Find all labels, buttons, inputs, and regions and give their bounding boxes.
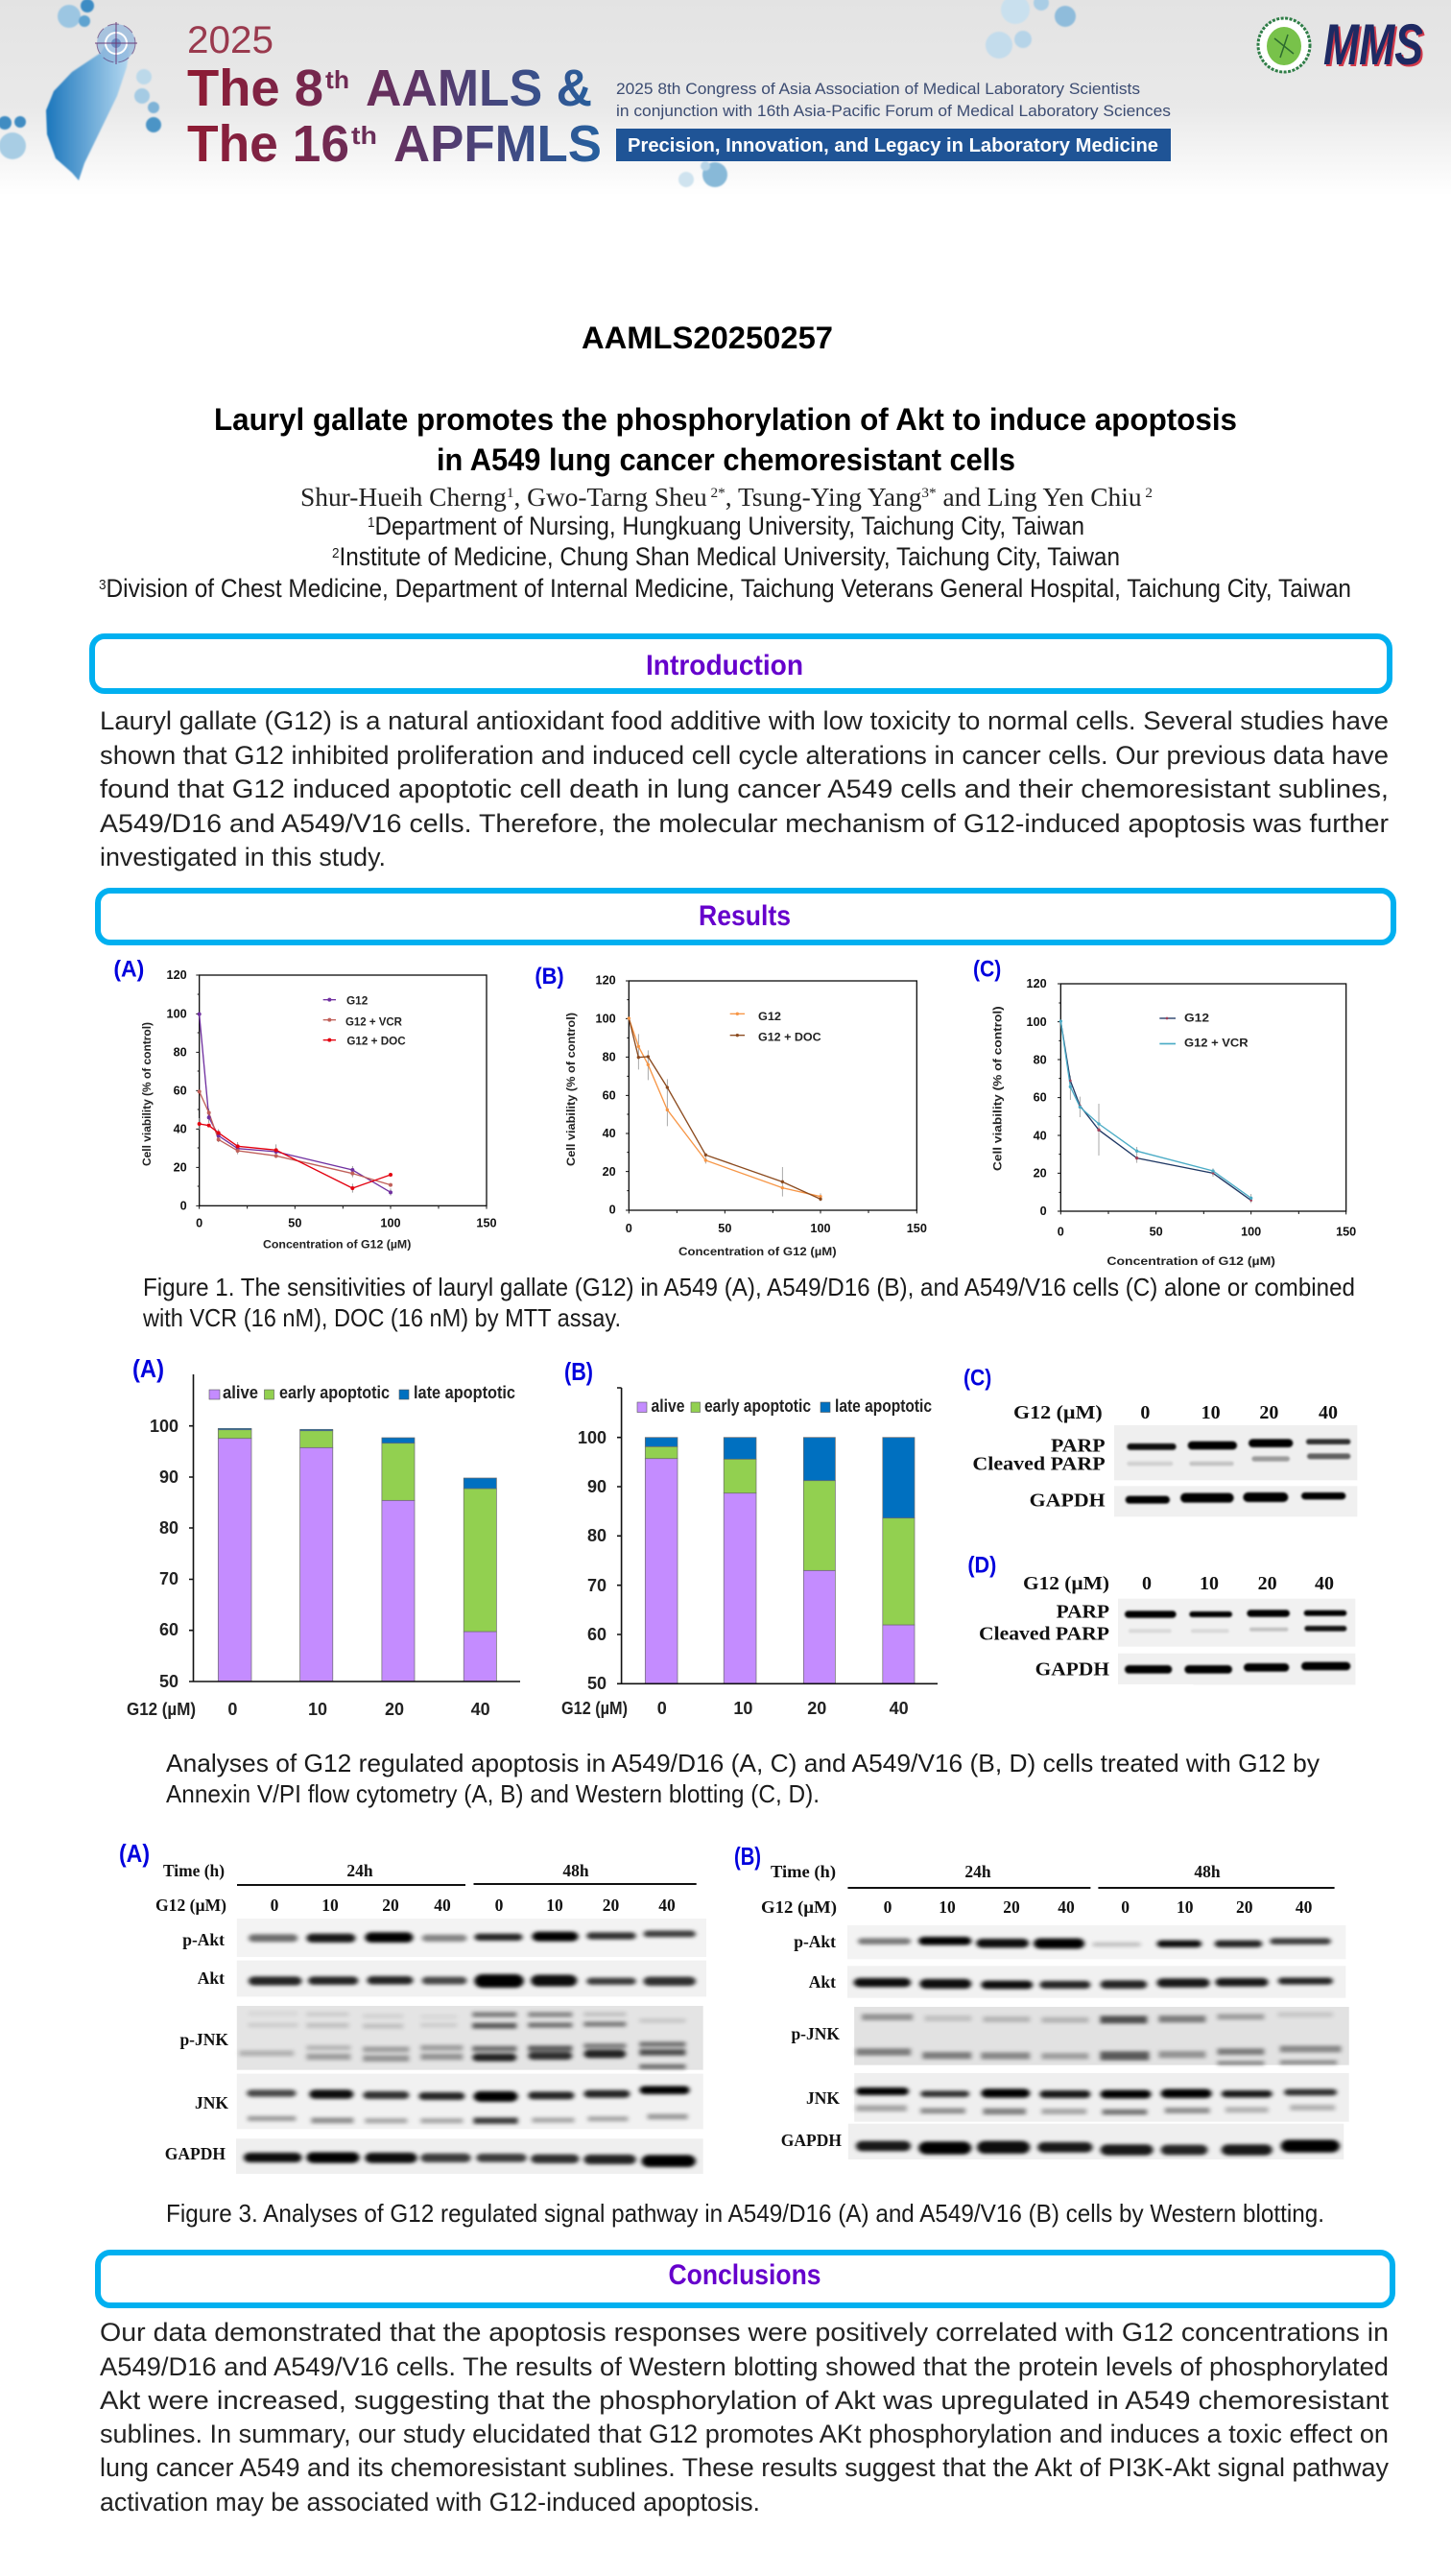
text block: Introduction body: investigated in this study. bbox=[100, 843, 386, 871]
chart: Figure 1C A549/V16 viability: G12 bbox=[1184, 1012, 1209, 1025]
title: Lauryl gallate promotes the phosphorylation of Akt to induce apoptosis bbox=[214, 402, 1237, 437]
panel: Figure 2C blot: Cleaved PARP bbox=[972, 1454, 1106, 1475]
western blot: Figure 3A A549/D16: 0 bbox=[495, 1896, 504, 1915]
chart: Figure 1A A549 viability: Cell viability (% of control) bbox=[140, 1022, 154, 1166]
bands: JNK bbox=[248, 2087, 688, 2123]
chart: Figure 2B A549/V16 stacked bars: 10 bbox=[733, 1699, 752, 1718]
affiliations: Department of Nursing, Hungkuang University, Taichung City, Taiwan bbox=[375, 512, 1084, 540]
panel: Conclusions heading bbox=[98, 2253, 1392, 2305]
chart: Figure 2A A549/D16 stacked bars: 20 bbox=[385, 1700, 404, 1719]
title bbox=[214, 402, 1237, 477]
authors: and Ling Yen Chiu bbox=[937, 483, 1142, 512]
heading: conference names: APFMLS bbox=[393, 115, 602, 173]
western blots: Figure 2C and 2D PARP bbox=[963, 1365, 1357, 1684]
chart: Figure 2A A549/D16 stacked bars: 10 bbox=[308, 1700, 327, 1719]
western blot: Figure 3B A549/V16: 0 bbox=[1121, 1897, 1130, 1917]
authors: Shur-Hueih Cherng bbox=[300, 483, 504, 512]
western blot: Figure 3A A549/D16: GAPDH bbox=[165, 2144, 226, 2163]
chart: Figure 2B A549/V16 stacked bars: 70 bbox=[587, 1576, 607, 1595]
western blot: Figure 3B A549/V16: 40 bbox=[1058, 1897, 1075, 1917]
chart: Figure 1A A549 viability: 100 bbox=[380, 1216, 401, 1229]
chart: Figure 2B A549/V16 stacked bars: 80 bbox=[587, 1526, 607, 1545]
chart: Figure 1B A549/D16 viability: 150 bbox=[907, 1222, 927, 1235]
bands: p-Akt bbox=[859, 1938, 1330, 1947]
caption: Figure 1: Figure 1. The sensitivities of lauryl gallate (G12) in A549 (A), A549/D16 (B), and A549/V16 cells (C) alone or combined bbox=[143, 1273, 1355, 1301]
chart: Figure 1C A549/V16 viability: 100 bbox=[1241, 1225, 1261, 1238]
western blot: Figure 3A A549/D16: p-Akt bbox=[182, 1930, 225, 1949]
chart: Figure 1B A549/D16 viability: Concentration of G12 (µM) bbox=[678, 1245, 837, 1258]
chart: Figure 1B A549/D16 viability: 0 bbox=[626, 1222, 632, 1235]
chart: Figure 2A A549/D16 stacked bars: 50 bbox=[159, 1672, 178, 1691]
text block: Conclusions body: activation may be associated with G12-induced apoptosis. bbox=[100, 2488, 760, 2516]
bands: p-JNK bbox=[857, 2013, 1340, 2064]
bands: GAPDH bbox=[245, 2153, 695, 2166]
caption: Figure 2: Annexin V/PI flow cytometry (A, B) and Western blotting (C, D). bbox=[166, 1779, 820, 1808]
chart: Figure 2B A549/V16 stacked bars bbox=[561, 1357, 938, 1718]
chart: Figure 2B A549/V16 stacked bars: 50 bbox=[587, 1674, 607, 1693]
chart: Figure 1A A549 viability: G12 + VCR bbox=[345, 1015, 402, 1029]
chart: Figure 1A A549 viability: 60 bbox=[174, 1084, 187, 1097]
chart: Figure 2A A549/D16 stacked bars bbox=[127, 1354, 520, 1719]
chart: Figure 2B A549/V16 stacked bars: (B) bbox=[564, 1357, 593, 1386]
authors: 2 bbox=[1142, 486, 1153, 501]
chart: Figure 1B A549/D16 viability: Cell viability (% of control) bbox=[564, 1013, 578, 1166]
chart: Figure 1C A549/V16 viability: 100 bbox=[1027, 1015, 1047, 1029]
panel: Figure 2D blot: 20 bbox=[1258, 1573, 1277, 1594]
western blot: Figure 3B A549/V16: 48h bbox=[1194, 1862, 1221, 1881]
chart: Figure 2A A549/D16 stacked bars: 40 bbox=[471, 1700, 490, 1719]
chart: Figure 2B A549/V16 stacked bars: 0 bbox=[657, 1699, 667, 1718]
chart: Figure 1A A549 viability: 100 bbox=[167, 1007, 187, 1020]
panel: Figure 2D blot: 40 bbox=[1315, 1573, 1334, 1594]
panel: Figure 2D blot: Cleaved PARP bbox=[979, 1623, 1109, 1644]
text: congress description: in conjunction with 16th Asia-Pacific Forum of Medical Laboratory Sciences bbox=[616, 102, 1171, 120]
affiliations: Division of Chest Medicine, Department of Internal Medicine, Taichung Veterans General Hospital, Taichung City, Taiwan bbox=[107, 574, 1351, 603]
legend bbox=[209, 1383, 515, 1402]
chart: Figure 1A A549 viability: G12 + DOC bbox=[346, 1035, 406, 1048]
western blot: Figure 3B A549/V16: G12 (µM) bbox=[761, 1897, 837, 1917]
western blot: Figure 3B A549/V16 bbox=[734, 1842, 1349, 2159]
chart: Figure 2A A549/D16 stacked bars: G12 (µM) bbox=[127, 1700, 196, 1719]
text block: Introduction body: found that G12 induced apoptotic cell death in lung cancer A549 cells and their chemoresistant sublines, bbox=[100, 775, 1389, 803]
chart: Figure 1A A549 viability: 120 bbox=[167, 968, 187, 982]
text block: Conclusions body: lung cancer A549 and its chemoresistant sublines. These results suggest that the Akt of PI3K-Akt signal pathway bbox=[100, 2453, 1389, 2482]
text: congress description: 2025 8th Congress of Asia Association of Medical Laboratory Scientists bbox=[616, 80, 1140, 98]
bands: Akt bbox=[855, 1978, 1332, 1988]
panel: Figure 2C blot: 20 bbox=[1259, 1402, 1278, 1423]
chart: Figure 1A A549 viability bbox=[113, 956, 497, 1252]
title: in A549 lung cancer chemoresistant cells bbox=[437, 442, 1015, 477]
chart: Figure 1B A549/D16 viability: 40 bbox=[603, 1127, 616, 1140]
text: congress description bbox=[616, 80, 1171, 120]
conference header banner bbox=[0, 0, 1451, 196]
bands: Akt bbox=[250, 1975, 695, 1987]
legend: alive bbox=[651, 1396, 685, 1416]
chart: Figure 1B A549/D16 viability: 100 bbox=[596, 1012, 616, 1025]
chart: Figure 2A A549/D16 stacked bars: (A) bbox=[132, 1354, 164, 1383]
chart: Figure 1B A549/D16 viability: 20 bbox=[603, 1165, 616, 1179]
text block: Introduction body: shown that G12 inhibited proliferation and induced cell cycle alterations in cancer cells. Our previous data have bbox=[100, 741, 1389, 770]
western blot: Figure 3B A549/V16: 10 bbox=[1177, 1897, 1194, 1917]
authors: 3* bbox=[921, 486, 937, 501]
text block: Conclusions body: Our data demonstrated that the apoptosis responses were positively correlated with G12 concentrations in bbox=[100, 2318, 1389, 2347]
authors: 2* bbox=[707, 486, 726, 501]
affiliations: 1 bbox=[368, 514, 375, 531]
western blot: Figure 3A A549/D16: 40 bbox=[434, 1896, 451, 1915]
panel: Figure 2C blot: (C) bbox=[963, 1365, 991, 1391]
legend: alive bbox=[223, 1383, 258, 1402]
chart: Figure 1A A549 viability: G12 bbox=[346, 994, 369, 1008]
chart: Figure 1A A549 viability: Concentration of G12 (µM) bbox=[263, 1238, 411, 1252]
panel: Figure 2C blot: G12 (µM) bbox=[1013, 1402, 1103, 1423]
caption: Figure 3: Figure 3. Analyses of G12 regulated signal pathway in A549/D16 (A) and A549/V16 (B) cells by Western blotting. bbox=[166, 2199, 1324, 2228]
chart: Figure 1A A549 viability: 20 bbox=[174, 1160, 187, 1174]
bands: GAPDH bbox=[857, 2140, 1339, 2155]
panel: Figure 2D blot: G12 (µM) bbox=[1023, 1573, 1109, 1594]
text block: Introduction body: Lauryl gallate (G12) is a natural antioxidant food additive with low toxicity to normal cells. Several studies have bbox=[100, 706, 1389, 735]
western blot: Figure 3A A549/D16 bbox=[119, 1839, 706, 2174]
legend: late apoptotic bbox=[835, 1396, 932, 1416]
chart: Figure 1B A549/D16 viability: 100 bbox=[810, 1222, 831, 1235]
chart: Figure 1A A549 viability: 80 bbox=[174, 1045, 187, 1059]
western blot: Figure 3B A549/V16: Time (h) bbox=[771, 1862, 836, 1881]
chart: Figure 1A A549 viability: 50 bbox=[288, 1216, 301, 1229]
chart: Figure 1C A549/V16 viability: 150 bbox=[1336, 1225, 1356, 1238]
panel: Figure 2D blot: 10 bbox=[1200, 1573, 1219, 1594]
chart: Figure 1B A549/D16 viability: 50 bbox=[718, 1222, 731, 1235]
western blot: Figure 3A A549/D16: 24h bbox=[346, 1861, 373, 1880]
chart: Figure 1B A549/D16 viability: 60 bbox=[603, 1088, 616, 1102]
heading: conference names: th bbox=[325, 65, 349, 94]
chart: Figure 1A A549 viability: (A) bbox=[113, 956, 144, 982]
legend: late apoptotic bbox=[414, 1383, 515, 1402]
caption: Figure 1 bbox=[142, 1273, 1355, 1332]
chart: Figure 1C A549/V16 viability: 60 bbox=[1034, 1091, 1047, 1105]
chart: Figure 2A A549/D16 stacked bars: 70 bbox=[159, 1569, 178, 1588]
bands: JNK bbox=[857, 2088, 1336, 2114]
affiliations: 2 bbox=[332, 545, 340, 561]
western blot: Figure 3B A549/V16: 20 bbox=[1236, 1897, 1253, 1917]
chart: Figure 1B A549/D16 viability: 120 bbox=[596, 973, 616, 987]
affiliations bbox=[99, 512, 1351, 603]
affiliations: 3 bbox=[99, 577, 107, 593]
text block: Introduction body: A549/D16 and A549/V16 cells. Therefore, the molecular mechanism of G12-induced apoptosis was further bbox=[100, 809, 1389, 838]
panel: Figure 2D blot bbox=[967, 1552, 1355, 1684]
panel: Introduction heading bbox=[92, 636, 1390, 691]
heading: 2025: 2025 bbox=[187, 19, 274, 61]
chart: Figure 1C A549/V16 viability: 80 bbox=[1034, 1053, 1047, 1066]
chart: Figure 2B A549/V16 stacked bars: 100 bbox=[578, 1428, 607, 1447]
text block: Introduction body bbox=[100, 706, 1389, 871]
abstract number: AAMLS20250257 bbox=[582, 321, 833, 355]
panel: Figure 2C blot: 10 bbox=[1201, 1402, 1221, 1423]
chart: Figure 1B A549/D16 viability: G12 bbox=[758, 1010, 781, 1023]
western blot: Figure 3B A549/V16: 40 bbox=[1296, 1897, 1313, 1917]
icon: decorative molecules bbox=[0, 0, 1076, 187]
panel: Figure 2D blot: GAPDH bbox=[1035, 1659, 1109, 1681]
western blot: Figure 3B A549/V16: 10 bbox=[939, 1897, 956, 1917]
chart: Figure 1C A549/V16 viability: 0 bbox=[1058, 1225, 1064, 1238]
western blot: Figure 3B A549/V16: 0 bbox=[884, 1897, 892, 1917]
western blot: Figure 3B A549/V16: (B) bbox=[734, 1842, 761, 1871]
chart: Figure 1C A549/V16 viability: 20 bbox=[1034, 1167, 1047, 1181]
western blot: Figure 3B A549/V16: 20 bbox=[1003, 1897, 1020, 1917]
heading: conference names: The 8 bbox=[187, 60, 323, 117]
western blot: Figure 3A A549/D16: p-JNK bbox=[179, 2030, 228, 2049]
western blot: Figure 3B A549/V16: JNK bbox=[806, 2088, 840, 2108]
chart: Figure 1C A549/V16 viability: 50 bbox=[1150, 1225, 1163, 1238]
heading: conference names bbox=[187, 60, 602, 173]
legend: early apoptotic bbox=[704, 1396, 811, 1416]
western blot: Figure 3B A549/V16: Akt bbox=[809, 1972, 836, 1992]
western blot: Figure 3A A549/D16: Akt bbox=[198, 1968, 225, 1988]
panel: Conclusions heading: Conclusions bbox=[668, 2259, 821, 2291]
authors: , Tsung-Ying Yang bbox=[726, 483, 921, 512]
western blot: Figure 3B A549/V16: p-Akt bbox=[794, 1932, 836, 1951]
chart: Figure 1B A549/D16 viability bbox=[535, 964, 927, 1258]
chart: Figure 1C A549/V16 viability: (C) bbox=[973, 956, 1001, 982]
heading: conference names: th bbox=[351, 121, 377, 150]
western blot: Figure 3B A549/V16: GAPDH bbox=[781, 2131, 842, 2150]
chart: Figure 2A A549/D16 stacked bars: 0 bbox=[227, 1700, 237, 1719]
chart: Figure 1A A549 viability: 0 bbox=[180, 1199, 187, 1212]
chart: Figure 1A A549 viability: 150 bbox=[476, 1216, 497, 1229]
chart: Figure 2A A549/D16 stacked bars: 80 bbox=[159, 1518, 178, 1538]
banner: motto bbox=[616, 129, 1171, 161]
chart: Figure 1C A549/V16 viability: G12 + VCR bbox=[1184, 1037, 1249, 1050]
panel: Figure 2C blot bbox=[963, 1365, 1357, 1516]
caption: Figure 2: Analyses of G12 regulated apoptosis in A549/D16 (A, C) and A549/V16 (B, D) cells treated with G12 by bbox=[166, 1749, 1320, 1777]
panel: Figure 2C blot: 0 bbox=[1140, 1402, 1150, 1423]
text block: Conclusions body bbox=[100, 2318, 1390, 2516]
panel: Results heading bbox=[98, 891, 1393, 942]
chart: Figure 2A A549/D16 stacked bars: 60 bbox=[159, 1620, 178, 1639]
chart: Figure 1A A549 viability: 0 bbox=[196, 1216, 202, 1229]
western blot: Figure 3A A549/D16: G12 (µM) bbox=[155, 1896, 226, 1915]
chart: Figure 1A A549 viability: 40 bbox=[174, 1122, 187, 1135]
banner: motto: Precision, Innovation, and Legacy in Laboratory Medicine bbox=[628, 135, 1158, 156]
panel: Figure 2D blot: PARP bbox=[1057, 1602, 1109, 1623]
heading: conference names: The 16 bbox=[187, 115, 349, 173]
chart: Figure 1B A549/D16 viability: (B) bbox=[535, 964, 564, 990]
authors: , Gwo-Tarng Sheu bbox=[513, 483, 707, 512]
western blot: Figure 3A A549/D16: (A) bbox=[119, 1839, 150, 1868]
panel: Results heading: Results bbox=[699, 900, 791, 932]
heading: conference names: AAMLS & bbox=[366, 60, 592, 117]
chart: Figure 2B A549/V16 stacked bars: 20 bbox=[807, 1699, 826, 1718]
western blot: Figure 3A A549/D16: 20 bbox=[603, 1896, 620, 1915]
authors: 1 bbox=[507, 486, 513, 501]
chart: Figure 2A A549/D16 stacked bars: 90 bbox=[159, 1467, 178, 1487]
chart: Figure 1C A549/V16 viability: 0 bbox=[1040, 1205, 1047, 1218]
icon: Taiwan map with target bbox=[46, 22, 137, 180]
panel: Figure 2D blot: (D) bbox=[967, 1552, 996, 1578]
chart: Figure 1C A549/V16 viability: Cell viability (% of control) bbox=[990, 1006, 1004, 1171]
western blot: Figure 3A A549/D16: 0 bbox=[271, 1896, 279, 1915]
chart: Figure 2B A549/V16 stacked bars: 90 bbox=[587, 1477, 607, 1496]
western blot: Figure 3A A549/D16: 20 bbox=[382, 1896, 399, 1915]
chart: Figure 1B A549/D16 viability: 80 bbox=[603, 1050, 616, 1063]
legend bbox=[637, 1396, 932, 1416]
western blot: Figure 3A A549/D16: Time (h) bbox=[163, 1861, 225, 1880]
text block: Conclusions body: A549/D16 and A549/V16 cells. The results of Western blotting showed that the protein levels of phosphorylated bbox=[100, 2352, 1389, 2381]
chart: Figure 2B A549/V16 stacked bars: 60 bbox=[587, 1625, 607, 1644]
western blot: Figure 3B A549/V16: p-JNK bbox=[791, 2024, 840, 2043]
bands: p-JNK bbox=[241, 2013, 684, 2068]
text block: Conclusions body: sublines. In summary, our study elucidated that G12 promotes AKt phosphorylation and induces a toxic effect on bbox=[100, 2420, 1389, 2448]
panel: Figure 2D blot: 0 bbox=[1142, 1573, 1152, 1594]
chart: Figure 1B A549/D16 viability: 0 bbox=[609, 1203, 616, 1216]
bands: p-Akt bbox=[250, 1932, 695, 1942]
panel: Figure 2C blot: GAPDH bbox=[1030, 1490, 1106, 1511]
western blot: Figure 3A A549/D16: 10 bbox=[321, 1896, 339, 1915]
chart: Figure 1C A549/V16 viability bbox=[973, 956, 1356, 1268]
chart: Figure 1C A549/V16 viability: Concentration of G12 (µM) bbox=[1106, 1254, 1275, 1268]
text block: Conclusions body: Akt were increased, suggesting that the phosphorylation of Akt was upregulated in A549 chemoresistant bbox=[100, 2386, 1390, 2415]
chart: Figure 1C A549/V16 viability: 40 bbox=[1034, 1129, 1047, 1142]
western blot: Figure 3A A549/D16: 48h bbox=[562, 1861, 589, 1880]
legend: early apoptotic bbox=[279, 1383, 390, 1402]
affiliations: Institute of Medicine, Chung Shan Medical University, Taichung City, Taiwan bbox=[340, 542, 1120, 571]
western blot: Figure 3B A549/V16: 24h bbox=[964, 1862, 991, 1881]
chart: Figure 2B A549/V16 stacked bars: G12 (µM) bbox=[561, 1699, 628, 1718]
panel: Figure 2C blot: PARP bbox=[1051, 1435, 1106, 1456]
panel: Figure 2C blot: 40 bbox=[1319, 1402, 1338, 1423]
chart: Figure 2A A549/D16 stacked bars: 100 bbox=[150, 1417, 178, 1436]
western blot: Figure 3A A549/D16: JNK bbox=[195, 2093, 228, 2112]
icon: society seal logo bbox=[1258, 18, 1310, 72]
panel: Introduction heading: Introduction bbox=[646, 650, 803, 681]
caption: Figure 2 bbox=[166, 1749, 1320, 1808]
caption: Figure 1: with VCR (16 nM), DOC (16 nM) by MTT assay. bbox=[142, 1303, 621, 1332]
western blot: Figure 3A A549/D16: 40 bbox=[658, 1896, 676, 1915]
chart: Figure 2B A549/V16 stacked bars: 40 bbox=[890, 1699, 909, 1718]
chart: Figure 1C A549/V16 viability: 120 bbox=[1027, 977, 1047, 990]
western blot: Figure 3A A549/D16: 10 bbox=[546, 1896, 563, 1915]
chart: Figure 1B A549/D16 viability: G12 + DOC bbox=[758, 1030, 821, 1043]
